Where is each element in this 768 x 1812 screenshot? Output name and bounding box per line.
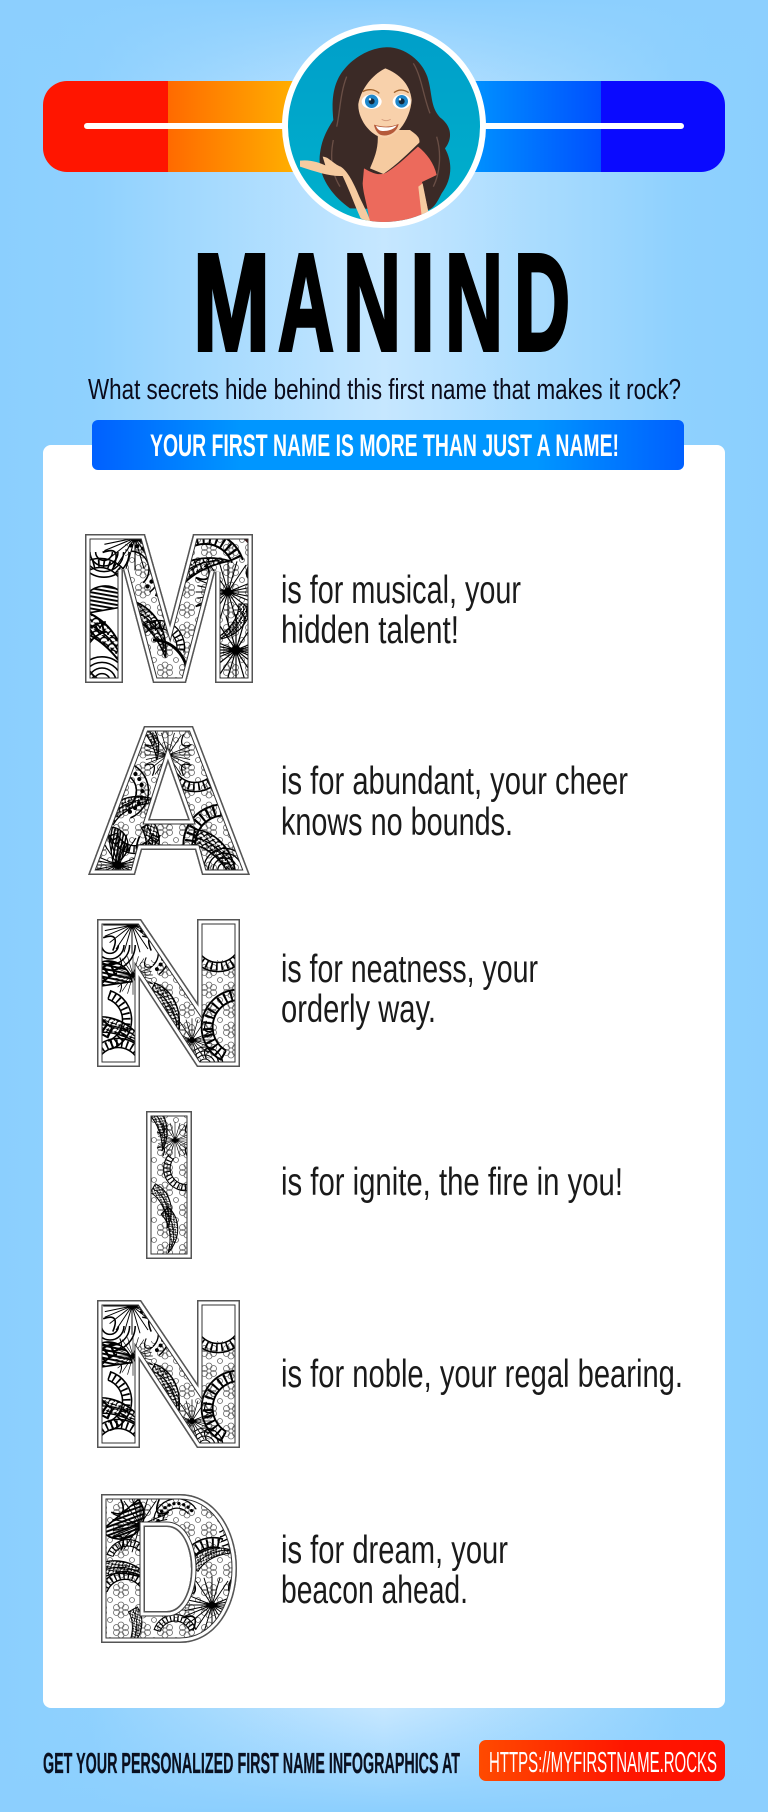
letter A zentangle [88, 726, 250, 875]
title [193, 226, 570, 380]
avatar: smiling woman in round badge [282, 24, 486, 228]
title: N [445, 226, 503, 380]
text: N [281, 948, 538, 1031]
title: I [410, 226, 435, 380]
text: A [281, 760, 628, 844]
text: A: knows no bounds. [281, 801, 513, 844]
neck and chest [370, 130, 419, 174]
text: M: is for musical, your [281, 569, 521, 612]
letter M zentangle [85, 534, 253, 683]
footer url button [479, 1740, 725, 1781]
panel: white content card [43, 445, 725, 1708]
text: N: orderly way. [281, 988, 436, 1031]
text: D [281, 1529, 508, 1612]
letter I zentangle [146, 1111, 192, 1259]
text: N: is for neatness, your [281, 948, 538, 991]
letter N zentangle [97, 919, 240, 1067]
title: D [514, 226, 570, 380]
banner [92, 420, 684, 470]
text: I: is for ignite, the fire in you! [281, 1161, 623, 1204]
title: A [278, 226, 334, 380]
header colour bar [43, 81, 725, 172]
text: D: beacon ahead. [281, 1569, 468, 1612]
letter D zentangle [101, 1494, 237, 1643]
eyes [362, 94, 382, 109]
text: A: is for abundant, your cheer [281, 760, 628, 803]
shirt [363, 147, 437, 227]
face [358, 68, 412, 138]
text: M [281, 569, 521, 652]
arm and hand [300, 157, 371, 223]
title: M [193, 226, 270, 380]
text: D: is for dream, your [281, 1529, 508, 1572]
hair [320, 47, 450, 210]
mouth [374, 124, 399, 135]
text: M: hidden talent! [281, 609, 459, 652]
letter N second zentangle [97, 1300, 240, 1448]
title: N [343, 226, 401, 380]
